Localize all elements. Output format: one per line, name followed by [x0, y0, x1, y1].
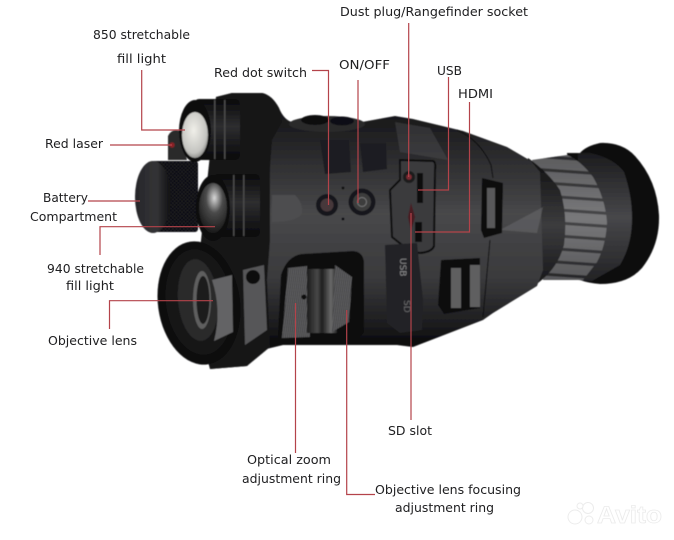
battery compartment cap — [135, 161, 198, 233]
red laser housing — [168, 130, 187, 160]
watermark: Avito — [568, 502, 662, 529]
watermark: Avito: Avito — [597, 502, 662, 529]
eyecup — [567, 143, 659, 284]
lens barrel — [175, 257, 221, 343]
callout: battery compartment — [30, 190, 140, 224]
callout: objective lens focusing adjustment ring: adjustment ring — [395, 500, 494, 515]
callout: usb — [418, 63, 462, 190]
callout: on/off: ON/OFF — [339, 57, 390, 72]
callout: 940 stretchable fill light — [47, 227, 215, 293]
callout: 850 stretchable fill light: 850 stretchable — [93, 27, 190, 42]
callout: hdmi — [415, 86, 493, 232]
callout: red laser — [45, 136, 172, 151]
objective bracket — [243, 265, 267, 345]
top ridge highlight — [395, 122, 448, 160]
top controls — [289, 115, 365, 132]
button: on/off — [348, 188, 376, 216]
strap loop — [481, 178, 503, 238]
focusing ring — [332, 265, 352, 332]
callout: red dot switch: Red dot switch — [214, 65, 307, 80]
dust plug socket — [403, 171, 415, 183]
callout: usb: USB — [437, 63, 462, 78]
callout: 940 stretchable fill light: fill light — [66, 278, 114, 293]
callout: objective lens — [48, 301, 213, 348]
callout: red dot switch — [214, 65, 328, 205]
callout: objective lens: Objective lens — [48, 333, 137, 348]
eyepiece knurled ring — [532, 155, 607, 280]
indicator dots — [342, 187, 344, 220]
main body — [200, 93, 543, 369]
callout: dust plug / rangefinder socket: Dust plug/Rangefinder socket — [340, 4, 528, 19]
sd slot — [408, 203, 415, 231]
callout: 850 stretchable fill light — [93, 27, 190, 130]
zoom window — [278, 251, 364, 345]
callout: 940 stretchable fill light: 940 stretchable — [47, 261, 144, 276]
optical zoom ring — [282, 266, 310, 338]
callout: objective lens focusing adjustment ring — [347, 310, 521, 515]
rubber flap: USB — [397, 258, 407, 276]
callout: hdmi: HDMI — [458, 86, 493, 101]
callout: 850 stretchable fill light: fill light — [117, 51, 166, 66]
light facet on rear body — [500, 207, 543, 233]
callout: sd slot: SD slot — [388, 423, 432, 438]
eyepiece neck — [520, 158, 565, 285]
callout: battery compartment: Compartment — [30, 209, 117, 224]
850 fill light — [179, 99, 240, 162]
usb port — [417, 173, 423, 203]
callout: objective lens focusing adjustment ring: Objective lens focusing — [375, 482, 521, 497]
hdmi port — [415, 222, 422, 242]
rubber flap: SD — [401, 300, 411, 313]
button: red dot switch — [316, 194, 338, 216]
callout: optical zoom adjustment ring — [242, 303, 341, 486]
rubber flap — [385, 243, 423, 333]
clamp ring — [212, 275, 233, 341]
rear seam line — [457, 130, 493, 317]
callout: battery compartment: Battery — [43, 190, 89, 205]
recessed grips — [320, 140, 387, 174]
port panel — [390, 160, 435, 253]
objective lens hood — [150, 236, 248, 370]
side grip bump — [272, 195, 302, 222]
middle barrel — [307, 269, 337, 333]
front plate — [200, 93, 282, 369]
940 fill light — [196, 174, 260, 241]
callout: red laser: Red laser — [45, 136, 104, 151]
product: night vision monocular — [135, 93, 659, 370]
rail buttons — [438, 258, 480, 314]
callout: optical zoom adjustment ring: adjustment ring — [242, 471, 341, 486]
callout: optical zoom adjustment ring: Optical zoom — [247, 452, 331, 467]
